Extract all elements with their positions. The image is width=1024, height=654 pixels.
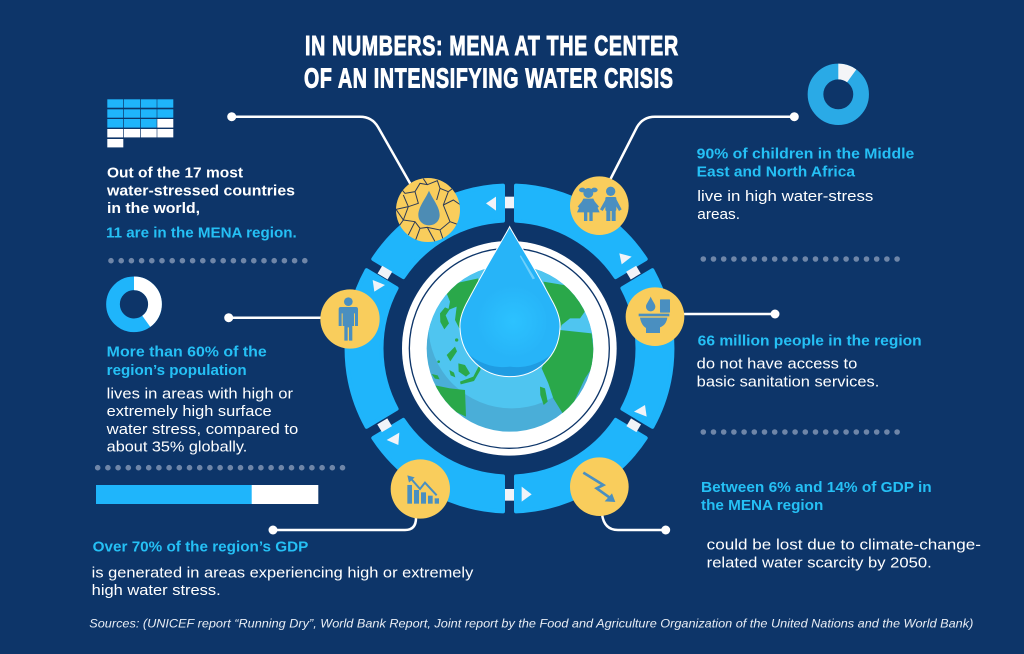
icon: toilet (626, 287, 684, 346)
text: 70 percent of GDP: is generated in areas experiencing high or extremely (92, 564, 474, 581)
text: 60 percent of population: extremely high surface (107, 403, 272, 420)
text: GDP loss: Between 6% and 14% of GDP in (701, 479, 932, 496)
dotted dividers (98, 259, 898, 468)
text: GDP loss: the MENA region (701, 497, 823, 514)
icon: person (320, 289, 380, 349)
title: IN NUMBERS: MENA AT THE CENTER (305, 31, 678, 62)
icon: cracked earth with drop (396, 178, 461, 242)
text: 90 percent of children: 90% of children in the Middle (697, 146, 914, 163)
text: 60 percent of population: region’s population (107, 362, 247, 379)
segmented blue ring (347, 186, 672, 511)
sources: Sources: (UNICEF report “Running Dry”, World Bank Report, Joint report by the Food and Agriculture Organization of the United Nations and the World Bank) (89, 617, 973, 631)
ring links and direction arrows (373, 197, 647, 502)
text: 17 countries: in the world, (107, 200, 200, 217)
text: 17 countries: 11 are in the MENA region. (106, 224, 297, 241)
text: 60 percent of population: More than 60% of the (107, 344, 267, 361)
text: 60 percent of population: water stress, compared to (106, 421, 298, 438)
text: GDP loss: related water scarcity by 2050. (707, 554, 932, 571)
text: 66 million people: basic sanitation services. (697, 374, 879, 391)
text: 17 countries: water-stressed countries (106, 182, 295, 199)
text: 90 percent of children: live in high water-stress (697, 188, 873, 205)
text: 17 countries: Out of the 17 most (107, 164, 243, 181)
text: 90 percent of children (697, 146, 914, 223)
text: 90 percent of children: areas. (697, 206, 740, 223)
donut chart: 60 percent (113, 283, 155, 325)
text: GDP loss (701, 479, 981, 571)
globe with water drop (402, 223, 617, 456)
icon: falling arrow (570, 457, 629, 516)
text: 66 million people: do not have access to (697, 355, 857, 372)
text: 70 percent of GDP: high water stress. (92, 582, 221, 599)
title (304, 31, 678, 94)
text: GDP loss: could be lost due to climate-change- (707, 536, 981, 553)
text: 70 percent of GDP (92, 539, 474, 599)
icon: children (570, 176, 629, 235)
title: OF AN INTENSIFYING WATER CRISIS (304, 63, 673, 94)
connector lines (224, 112, 799, 534)
icon: declining bar chart (391, 459, 450, 519)
text: 66 million people: 66 million people in the region (698, 333, 922, 350)
donut chart: 90 percent (816, 72, 861, 117)
text: 60 percent of population: about 35% globally. (107, 439, 247, 456)
text: 60 percent of population (106, 344, 298, 456)
text: 66 million people (697, 333, 922, 391)
icon: 17 country grid (107, 99, 173, 147)
text: 90 percent of children: East and North Africa (697, 164, 856, 181)
text: 70 percent of GDP: Over 70% of the region’s GDP (93, 539, 308, 556)
text: 17 countries (106, 164, 297, 241)
progress bar: 70 percent (96, 485, 318, 504)
text: 60 percent of population: lives in areas with high or (107, 385, 293, 402)
